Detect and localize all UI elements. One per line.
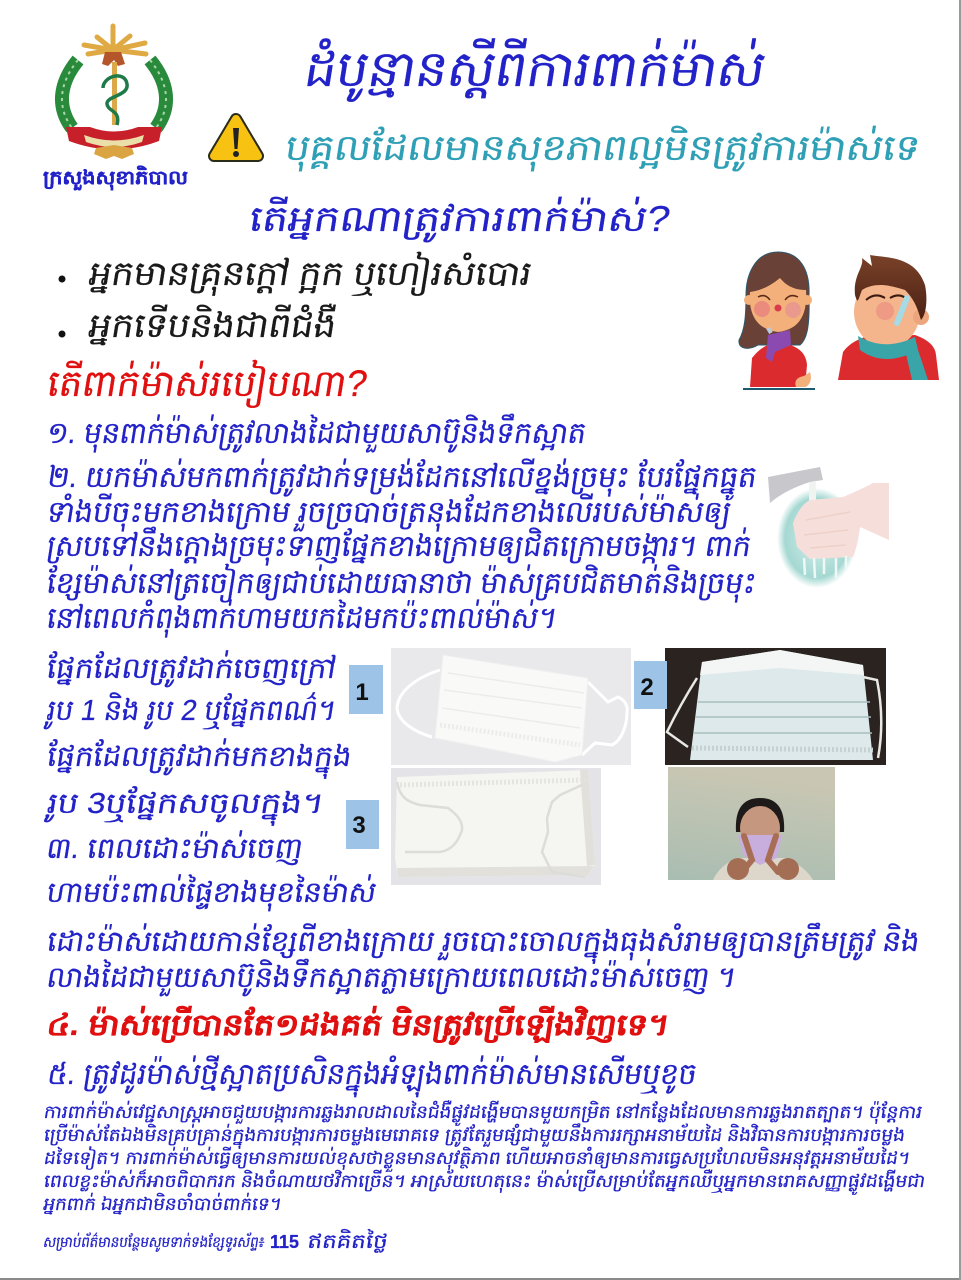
step 1: ១. មុនពាក់ម៉ាស់ត្រូវលាងដៃជាមួយសាប៊ូនិងទឹកស្អាត: [44, 413, 589, 453]
step 2: ទាំងបីចុះមកខាងក្រោម រួចច្របាច់ត្រនុងដែកខាងលើរបស់ម៉ាស់ឲ្យ: [44, 493, 734, 532]
step 4: single use warning: ៤. ម៉ាស់ប្រើបានតែ១ដងគត់ មិនត្រូវប្រើឡើងវិញទេ។: [44, 1005, 672, 1046]
label: 1: 1: [355, 679, 369, 706]
left column text: which side faces where: រូប 3ឬផ្នែកសចូលក្នុង។: [43, 785, 326, 826]
step 5: ៥. ត្រូវដូរម៉ាស់ថ្មីស្អាតប្រសិនក្នុងអំឡុងពាក់ម៉ាស់មានសើមឬខូច: [44, 1055, 700, 1098]
heading: how to wear a mask: តើពាក់ម៉ាស់របៀបណា?: [44, 359, 371, 408]
warning message: បុគ្គលដែលមានសុខភាពល្អមិនត្រូវការម៉ាស់ទេ: [282, 125, 923, 172]
hotline footer: ឥតគិតថ្លៃ: [306, 1228, 390, 1253]
label: 2: 2: [640, 674, 654, 701]
label: 1: [349, 665, 383, 714]
step 3 continued: [44, 922, 923, 997]
hotline footer: សម្រាប់ព័ត៌មានបន្ថែមសូមទាក់ទងខ្សែទូរស័ព្ទ៖: [42, 1232, 266, 1252]
photo 4: woman fitting a mask: [668, 767, 835, 880]
step 3 continued: លាងដៃជាមួយសាប៊ូនិងទឹកស្អាតភ្លាមក្រោយពេលដោះម៉ាស់ចេញ ។: [44, 958, 739, 997]
wreath: [62, 60, 166, 128]
note paragraph: ប្រើម៉ាស់តែឯងមិនគ្រប់គ្រាន់ក្នុងការបង្ការការចម្លងមេរោគទេ ត្រូវតែរួមផ្សំជាមួយនឹងការរក្សាអនាម័យដៃ និងវិធានការបង្ការការចម្លង: [42, 1123, 907, 1149]
photo 1: white mask front: [391, 648, 631, 765]
bullet list: អ្នកទើបនិងជាពីជំងឺ: [86, 303, 340, 346]
label: 3: [346, 800, 379, 849]
step 2: ខ្សែម៉ាស់នៅត្រចៀកឲ្យជាប់ដោយធានាថា ម៉ាស់គ្របជិតមាត់និងច្រមុះ: [44, 563, 759, 603]
note paragraph: ការពាក់ម៉ាស់វេជ្ជសាស្រ្តអាចជួយបង្ការការឆ្លងរាលដាលនៃជំងឺផ្លូវដង្ហើមបានមួយកម្រិត នៅកន្លែងដែលមានការឆ្លងរាតត្បាត។ ប៉ុន្តែការ: [42, 1100, 924, 1126]
icon: hand washing: [768, 467, 889, 588]
title: ដំបូន្មានស្តីពីការពាក់ម៉ាស់: [300, 38, 770, 102]
sun rays: [84, 26, 146, 54]
step 2: ២. យកម៉ាស់មកពាក់ត្រូវដាក់ទម្រង់ដែកនៅលើខ្នង់ច្រមុះ បែរផ្នែកធ្នូត: [44, 458, 760, 501]
bullet list: អ្នកមានគ្រុនក្តៅ ក្អក ឬហៀរសំបោរ: [86, 251, 535, 296]
photo 3: white mask inner side: [391, 768, 601, 885]
photo 2: blue mask on dark background: [665, 648, 886, 765]
heading: who needs masks: តើអ្នកណាត្រូវការពាក់ម៉ាស់?: [246, 196, 673, 243]
icon: sick woman: [739, 252, 815, 390]
step 3 continued: ដោះម៉ាស់ដោយកាន់ខ្សែពីខាងក្រោយ រួចបោះចោលក្នុងធុងសំរាមឲ្យបានត្រឹមត្រូវ និង: [44, 922, 923, 964]
step 2: នៅពេលកំពុងពាក់ហាមយកដៃមកប៉ះពាល់ម៉ាស់។: [44, 599, 560, 638]
step 3 start: ៣. ពេលដោះម៉ាស់ចេញ: [44, 830, 306, 866]
hotline footer: [42, 1228, 390, 1253]
note paragraph: [42, 1100, 927, 1215]
left column text: which side faces where: ផ្នែកដែលត្រូវដាក់មកខាងក្នុង: [44, 738, 354, 779]
note paragraph: ពេលខ្លះម៉ាស់ក៏អាចពិបាករក និងចំណាយថវិកាច្រើន។ អាស្រ័យហេតុនេះ ម៉ាស់ប្រើសម្រាប់តែអ្នកឈឺឬអ្នកមានរោគសញ្ញាផ្លូវដង្ហើមជា: [42, 1169, 927, 1195]
left column text: which side faces where: [43, 650, 379, 912]
icon: sick man: [838, 255, 939, 380]
bullet list: [58, 251, 535, 346]
note paragraph: ដទៃទៀត។ ការពាក់ម៉ាស់ធ្វើឲ្យមានការយល់ខុសថាខ្លួនមានសុវត្ថិភាព ហើយអាចនាំឲ្យមានការធ្វេសប្រហែលមិនអនុវត្តអនាម័យដៃ។: [42, 1146, 912, 1172]
label: 2: [634, 661, 667, 709]
left column text: which side faces where: ហាមប៉ះពាល់ផ្ទៃខាងមុខនៃម៉ាស់: [44, 874, 379, 912]
note paragraph: អ្នកពាក់ ឯអ្នកជាមិនចាំបាច់ពាក់ទេ។: [42, 1192, 284, 1215]
logo: Ministry of Health emblem: [43, 26, 188, 191]
label: 3: 3: [352, 812, 366, 839]
left column text: which side faces where: ផ្នែកដែលត្រូវដាក់ចេញក្រៅ: [44, 650, 339, 688]
step 2: [44, 458, 760, 638]
icon: warning triangle: [214, 119, 258, 157]
left column text: which side faces where: រូប 1 និង រូប 2 ឬផ្នែកពណ៌។: [43, 692, 339, 730]
hotline footer: 115: [270, 1232, 299, 1252]
logo caption: ក្រសួងសុខាភិបាល: [43, 165, 188, 191]
step 2: ស្របទៅនឹងក្តោងច្រមុះទាញផ្នែកខាងក្រោមឲ្យជិតក្រោមចង្ការ។ ពាក់: [44, 526, 754, 566]
